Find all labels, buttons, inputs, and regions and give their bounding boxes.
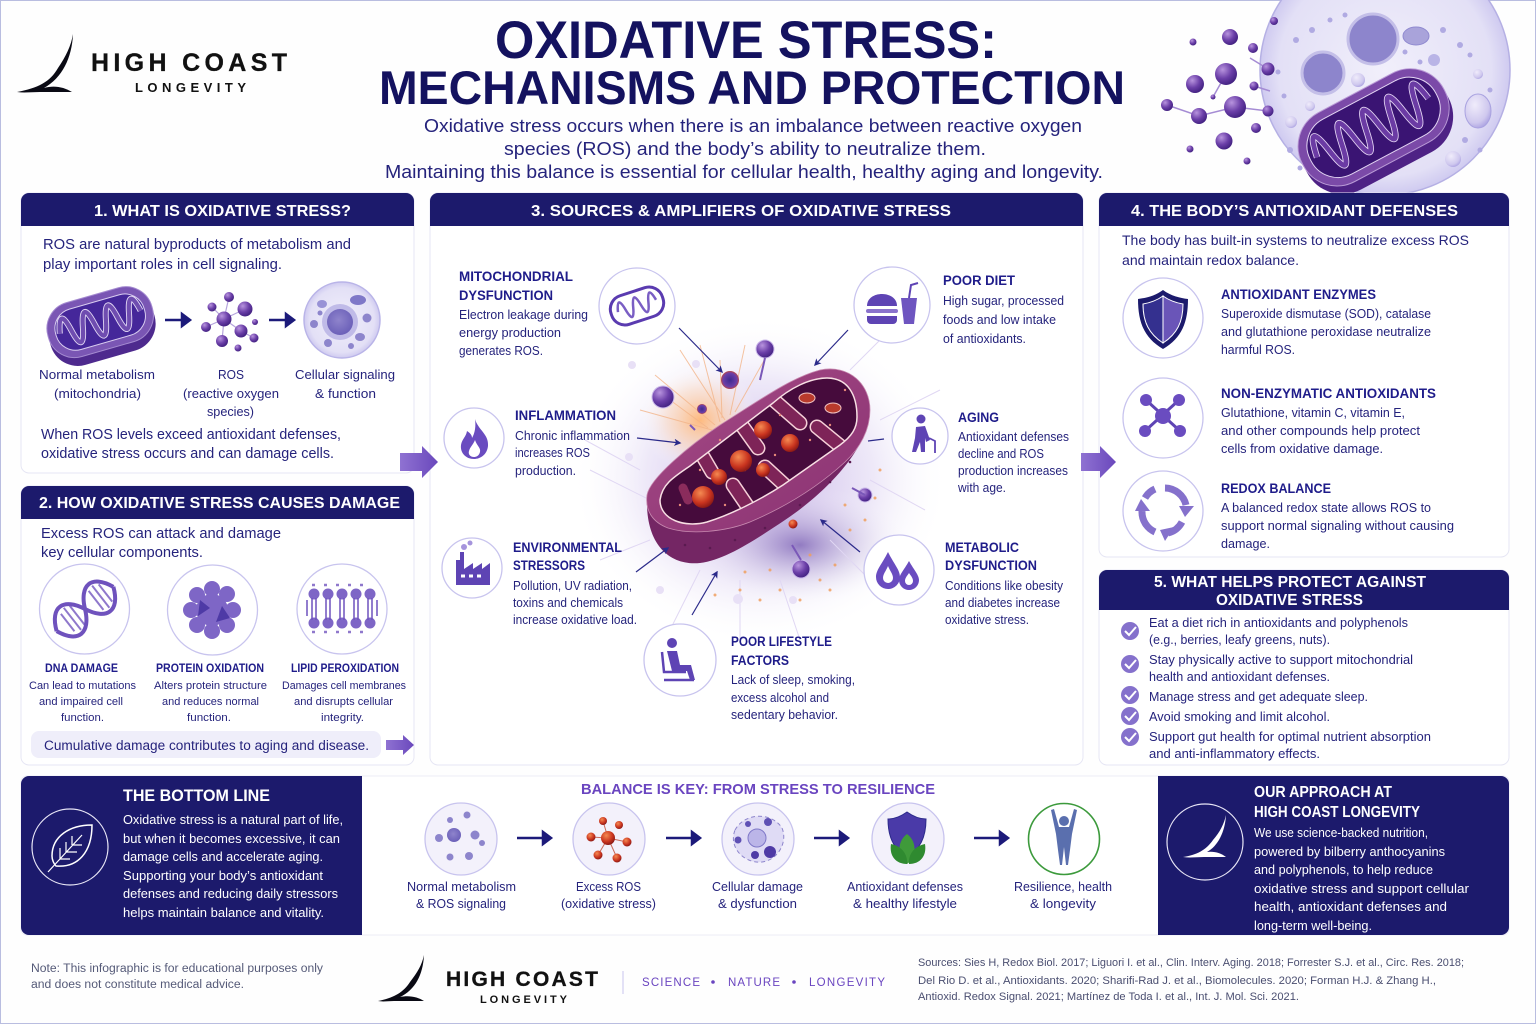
panel 1 intro text: play important roles in cell signaling.: [43, 257, 282, 273]
panel: balance is key: [407, 781, 1112, 911]
antioxidant enzymes text: Superoxide dismutase (SOD), catalase: [1221, 307, 1431, 321]
checklist item: gut: and anti-inflammatory effects.: [1149, 747, 1320, 761]
environmental stressors text: toxins and chemicals: [513, 596, 623, 610]
checklist item: gut: [1121, 728, 1431, 761]
checklist item: activity: health and antioxidant defenses.: [1149, 670, 1330, 684]
central illustration: mitochondrion with radiating ROS: [584, 328, 940, 640]
icon: logo in circle: [1167, 804, 1243, 880]
panel 1 intro text: ROS are natural byproducts of metabolism and: [43, 237, 351, 253]
title: OXIDATIVE STRESS:: [495, 11, 997, 70]
approach text: long-term well-being.: [1254, 918, 1372, 933]
poor lifestyle text: [731, 634, 855, 722]
intro text: Oxidative stress occurs when there is an imbalance between reactive oxygen: [424, 116, 1082, 136]
flow step labels: Cellular damage: [712, 880, 803, 894]
metabolic dysfunction text: oxidative stress.: [945, 613, 1029, 627]
approach text: oxidative stress and support cellular: [1254, 881, 1470, 896]
ROS molecules: [1161, 17, 1278, 164]
item headings: [45, 663, 399, 675]
checklist item: diet: [1121, 616, 1408, 647]
icon: normal ROS: [425, 803, 497, 875]
flow step labels: & ROS signaling: [416, 897, 506, 911]
flow step labels: Excess ROS: [576, 880, 641, 894]
poor lifestyle text: excess alcohol and: [731, 691, 829, 705]
bottom line text: [123, 812, 343, 920]
logo wordmark: HIGH COAST: [91, 49, 287, 77]
icon: flame: [444, 408, 504, 468]
inflammation text: increases ROS: [515, 446, 590, 460]
panel 2 intro text: [41, 526, 281, 561]
flow labels: (mitochondria): [54, 386, 141, 401]
item descriptions: integrity.: [321, 712, 364, 724]
poor lifestyle text: FACTORS: [731, 653, 789, 668]
redox balance text: [1221, 481, 1454, 551]
checklist item: gut: Support gut health for optimal nutrient absorption: [1149, 730, 1431, 744]
bottom band background: [21, 776, 1509, 935]
icon: seated person: [644, 624, 716, 696]
glow: [570, 315, 950, 645]
flow step labels: Antioxidant defenses: [847, 880, 963, 894]
arrow: [666, 832, 700, 844]
approach text: health, antioxidant defenses and: [1254, 899, 1447, 914]
icon: cellular damage: [722, 803, 794, 875]
panel 1 closing text: When ROS levels exceed antioxidant defenses,: [41, 427, 341, 443]
poor diet text: of antioxidants.: [943, 332, 1026, 346]
panel 3: sources and amplifiers: [430, 193, 1083, 765]
checklist item: diet: (e.g., berries, leafy greens, nuts).: [1149, 633, 1330, 647]
mitochondrial dysfunction text: Electron leakage during: [459, 308, 588, 322]
item descriptions: and reduces normal: [162, 696, 259, 708]
footer tagline: [642, 977, 885, 989]
aging text: with age.: [957, 481, 1006, 495]
flow step labels: (oxidative stress): [561, 897, 656, 911]
panel 4 intro text: and maintain redox balance.: [1122, 252, 1299, 268]
bottom line text: damage cells and accelerate aging.: [123, 849, 323, 864]
arrow: ROS to cell: [269, 314, 294, 326]
logo swoosh: [17, 34, 73, 92]
icon: molecule: [1123, 378, 1203, 458]
flow labels: Cellular signaling: [295, 367, 395, 382]
antioxidant enzymes text: harmful ROS.: [1221, 343, 1295, 357]
inflammation text: [515, 408, 630, 478]
panel 5 heading: [1099, 570, 1509, 610]
flow labels: species): [207, 404, 254, 419]
poor diet text: High sugar, processed: [943, 294, 1064, 308]
panel 1 heading: [21, 193, 414, 226]
metabolic dysfunction text: METABOLIC: [945, 540, 1019, 555]
checklist item: sleep: [1121, 686, 1368, 704]
logo wordmark: [91, 49, 287, 95]
mitochondrial dysfunction text: [459, 269, 588, 358]
icon: redox cycle: [1123, 471, 1203, 551]
non-enzymatic antioxidants text: [1221, 386, 1436, 456]
panel 1 intro text: [43, 237, 351, 273]
inflammation text: INFLAMMATION: [515, 408, 616, 423]
footer note: Note: This infographic is for educational purposes only: [31, 963, 323, 975]
icon: small mitochondrion: [599, 268, 675, 344]
inflammation text: production.: [515, 464, 576, 478]
arrow: [517, 832, 551, 844]
panel 5: what helps protect: [1099, 570, 1509, 765]
flow step labels: [407, 880, 1112, 911]
footer sources: Antioxid. Redox Signal. 2021; Martínez de Toda I. et al., Int. J. Mol. Sci. 2021.: [918, 991, 1299, 1003]
flow labels: & function: [315, 386, 376, 401]
environmental stressors text: increase oxidative load.: [513, 613, 637, 627]
icon: elderly person with cane: [892, 408, 948, 464]
environmental stressors text: [513, 540, 637, 627]
bottom line heading: THE BOTTOM LINE: [123, 787, 270, 805]
flow step labels: Resilience, health: [1014, 880, 1112, 894]
item descriptions: Alters protein structure: [154, 680, 267, 692]
reactive spheres: [652, 340, 872, 578]
cell: [1260, 0, 1510, 195]
source: poor diet: [854, 267, 1064, 346]
bottom line text: Oxidative stress is a natural part of life,: [123, 812, 343, 827]
mitochondrial dysfunction text: energy production: [459, 326, 561, 340]
source: aging: [892, 408, 1069, 495]
poor diet text: foods and low intake: [943, 313, 1056, 327]
title: [379, 11, 1125, 114]
approach heading: OUR APPROACH AT: [1254, 784, 1392, 801]
panel 2 intro text: Excess ROS can attack and damage: [41, 526, 281, 542]
arrow: metabolism to ROS: [165, 314, 190, 326]
panel 5 heading: OXIDATIVE STRESS: [1216, 592, 1363, 609]
metabolic dysfunction text: and diabetes increase: [945, 596, 1060, 610]
footer note: and does not constitute medical advice.: [31, 979, 244, 991]
poor diet text: POOR DIET: [943, 273, 1016, 288]
poor lifestyle text: sedentary behavior.: [731, 708, 838, 722]
item descriptions: and impaired cell: [39, 696, 123, 708]
arrow: damage to aging: [386, 735, 414, 755]
poor diet text: [943, 273, 1064, 346]
icon: ROS molecules: [201, 292, 258, 352]
checklist item: diet: Eat a diet rich in antioxidants and polyphenols: [1149, 616, 1408, 630]
icon: cell: [304, 282, 380, 358]
item descriptions: Damages cell membranes: [282, 680, 406, 692]
icon: DNA: [40, 564, 130, 654]
approach text: [1254, 825, 1470, 933]
item descriptions: function.: [61, 712, 104, 724]
checklist item: activity: Stay physically active to support mitochondrial: [1149, 653, 1413, 667]
mitochondrial dysfunction text: generates ROS.: [459, 344, 543, 358]
footer wordmark: LONGEVITY: [480, 994, 568, 1006]
item descriptions: Can lead to mutations: [29, 680, 136, 692]
approach heading: HIGH COAST LONGEVITY: [1254, 804, 1421, 821]
icon: factory: [442, 538, 502, 598]
item descriptions: [29, 680, 406, 724]
icon: protein: [168, 565, 258, 655]
footer tagline: SCIENCE: [642, 977, 700, 989]
mitochondrial dysfunction text: MITOCHONDRIAL: [459, 269, 573, 284]
source: inflammation: [444, 408, 630, 478]
icon: excess ROS: [573, 803, 645, 875]
source: environmental stressors: [442, 538, 637, 627]
flow labels: (reactive oxygen: [183, 386, 279, 401]
item headings: PROTEIN OXIDATION: [156, 663, 264, 675]
intro text: Maintaining this balance is essential for cellular health, healthy aging and longevity.: [385, 162, 1103, 182]
arrow: [814, 832, 848, 844]
title: MECHANISMS AND PROTECTION: [379, 61, 1125, 114]
hero illustration: cell, mitochondrion and ROS molecules: [1161, 0, 1510, 208]
icon: drops: [864, 535, 934, 605]
icon: leaf: [32, 809, 108, 885]
panel 1 heading: 1. WHAT IS OXIDATIVE STRESS?: [94, 203, 351, 220]
panel 1: what is oxidative stress: [21, 193, 414, 473]
arrow: panels 1-2 to panel 3: [400, 446, 438, 478]
checklist item: smoking: [1121, 707, 1330, 725]
panel 1 closing text: oxidative stress occurs and can damage cells.: [41, 446, 334, 462]
panel 5 heading: 5. WHAT HELPS PROTECT AGAINST: [1154, 574, 1426, 591]
callout: cumulative damage: Cumulative damage contributes to aging and disease.: [44, 738, 369, 753]
metabolic dysfunction text: [945, 540, 1064, 627]
footer logo: [378, 955, 598, 1006]
antioxidant enzymes text: and glutathione peroxidase neutralize: [1221, 325, 1431, 339]
approach text: We use science-backed nutrition,: [1254, 825, 1428, 840]
checklist item: smoking: Avoid smoking and limit alcohol.: [1149, 710, 1330, 724]
panel 4 intro text: [1122, 232, 1469, 268]
flow step labels: & dysfunction: [718, 897, 797, 911]
item headings: LIPID PEROXIDATION: [291, 663, 399, 675]
approach text: powered by bilberry anthocyanins: [1254, 844, 1445, 859]
flow step labels: & longevity: [1030, 897, 1097, 911]
aging text: production increases: [958, 464, 1068, 478]
arrow: [974, 832, 1008, 844]
panel 3 heading: 3. SOURCES & AMPLIFIERS OF OXIDATIVE STRESS: [531, 203, 951, 220]
panel 4 heading: [1099, 193, 1509, 226]
poor lifestyle text: POOR LIFESTYLE: [731, 634, 832, 649]
footer sources: Del Rio D. et al., Antioxidants. 2020; Sharifi-Rad J. et al., Biomolecules. 2020; Forman H.J. & Zhang H.,: [918, 975, 1436, 987]
icon: shield and leaves: [872, 803, 944, 875]
bottom line text: defenses and reducing daily stressors: [123, 886, 338, 901]
redox balance text: REDOX BALANCE: [1221, 481, 1331, 496]
panel 4 heading: 4. THE BODY’S ANTIOXIDANT DEFENSES: [1131, 203, 1458, 220]
non-enzymatic antioxidants text: NON-ENZYMATIC ANTIOXIDANTS: [1221, 386, 1436, 401]
panel 2 intro text: key cellular components.: [41, 545, 203, 561]
poor lifestyle text: Lack of sleep, smoking,: [731, 673, 855, 687]
panel 2: how oxidative stress causes damage: [21, 486, 414, 765]
panel 2 heading: [21, 486, 414, 519]
source: poor lifestyle factors: [644, 624, 855, 722]
flow step labels: & healthy lifestyle: [853, 897, 957, 911]
antioxidant enzymes text: [1221, 287, 1431, 357]
icon: mitochondrion: [41, 280, 162, 373]
metabolic dysfunction text: Conditions like obesity: [945, 579, 1064, 593]
bottom line text: but when it becomes excessive, it can: [123, 831, 340, 846]
footer tagline: LONGEVITY: [809, 977, 885, 989]
environmental stressors text: Pollution, UV radiation,: [513, 579, 632, 593]
icon: burger and cup: [854, 267, 930, 343]
aging text: Antioxidant defenses: [958, 430, 1069, 444]
redox balance text: support normal signaling without causing: [1221, 519, 1454, 533]
footer sources: Sources: Sies H, Redox Biol. 2017; Liguori I. et al., Clin. Interv. Aging. 2018; Forrester S.J. et al., Circ. Res. 2018;: [918, 957, 1464, 969]
icon: lipid membrane: [297, 564, 387, 654]
approach heading: [1254, 784, 1421, 821]
footer wordmark: [446, 968, 598, 1006]
footer swoosh: [378, 955, 424, 1001]
panel 3 heading: [430, 193, 1083, 226]
non-enzymatic antioxidants text: cells from oxidative damage.: [1221, 442, 1383, 456]
panel 4 intro text: The body has built-in systems to neutralize excess ROS: [1122, 232, 1469, 248]
bottom line text: Supporting your body’s antioxidant: [123, 868, 323, 883]
icon: resilient person: [1028, 804, 1100, 874]
non-enzymatic antioxidants text: and other compounds help protect: [1221, 424, 1421, 438]
aging text: [957, 410, 1069, 495]
bottom line text: helps maintain balance and vitality.: [123, 905, 324, 920]
hero mitochondrion: [1285, 55, 1467, 208]
panel: the bottom line: [21, 776, 362, 935]
metabolic dysfunction text: DYSFUNCTION: [945, 558, 1037, 573]
footer note: [31, 963, 323, 991]
non-enzymatic antioxidants text: Glutathione, vitamin C, vitamin E,: [1221, 406, 1405, 420]
logo wordmark: LONGEVITY: [135, 80, 246, 95]
panel: our approach: [1158, 776, 1509, 935]
mitochondrial dysfunction text: DYSFUNCTION: [459, 288, 553, 303]
environmental stressors text: ENVIRONMENTAL: [513, 540, 622, 555]
mitochondrion body: [647, 369, 870, 563]
approach text: and polyphenols, to help reduce: [1254, 862, 1433, 877]
redox balance text: A balanced redox state allows ROS to: [1221, 501, 1431, 515]
callout: cumulative damage: [31, 731, 381, 758]
aging text: decline and ROS: [958, 447, 1044, 461]
source: mitochondrial dysfunction: [459, 268, 675, 358]
source: metabolic dysfunction: [864, 535, 1064, 627]
arrow: panel 3 to panel 4: [1081, 446, 1116, 478]
arrows to mitochondrion: [636, 328, 860, 615]
redox balance text: damage.: [1221, 537, 1270, 551]
flow labels: [39, 367, 395, 419]
balance heading: BALANCE IS KEY: FROM STRESS TO RESILIENCE: [581, 781, 935, 798]
checklist item: sleep: Manage stress and get adequate sleep.: [1149, 690, 1368, 704]
checklist item: activity: [1121, 653, 1413, 684]
environmental stressors text: STRESSORS: [513, 558, 585, 573]
panel 4: antioxidant defenses: [1099, 193, 1509, 557]
intro text: [385, 116, 1103, 182]
item headings: DNA DAMAGE: [45, 663, 118, 675]
flow labels: ROS: [218, 367, 244, 382]
flow labels: Normal metabolism: [39, 367, 155, 382]
icon: shield: [1123, 278, 1203, 358]
panel 2 heading: 2. HOW OXIDATIVE STRESS CAUSES DAMAGE: [39, 495, 400, 512]
footer sources: [918, 957, 1464, 1003]
inflammation text: Chronic inflammation: [515, 429, 630, 443]
item descriptions: function.: [187, 712, 231, 724]
footer tagline: NATURE: [728, 977, 780, 989]
flow step labels: Normal metabolism: [407, 880, 516, 894]
intro text: species (ROS) and the body’s ability to neutralize them.: [504, 139, 986, 159]
logo: High Coast Longevity header: [17, 34, 287, 95]
footer wordmark: HIGH COAST: [446, 968, 598, 991]
aging text: AGING: [958, 410, 999, 425]
panel 1 closing text: [41, 427, 341, 462]
item descriptions: and disrupts cellular: [294, 696, 393, 708]
antioxidant enzymes text: ANTIOXIDANT ENZYMES: [1221, 287, 1376, 302]
